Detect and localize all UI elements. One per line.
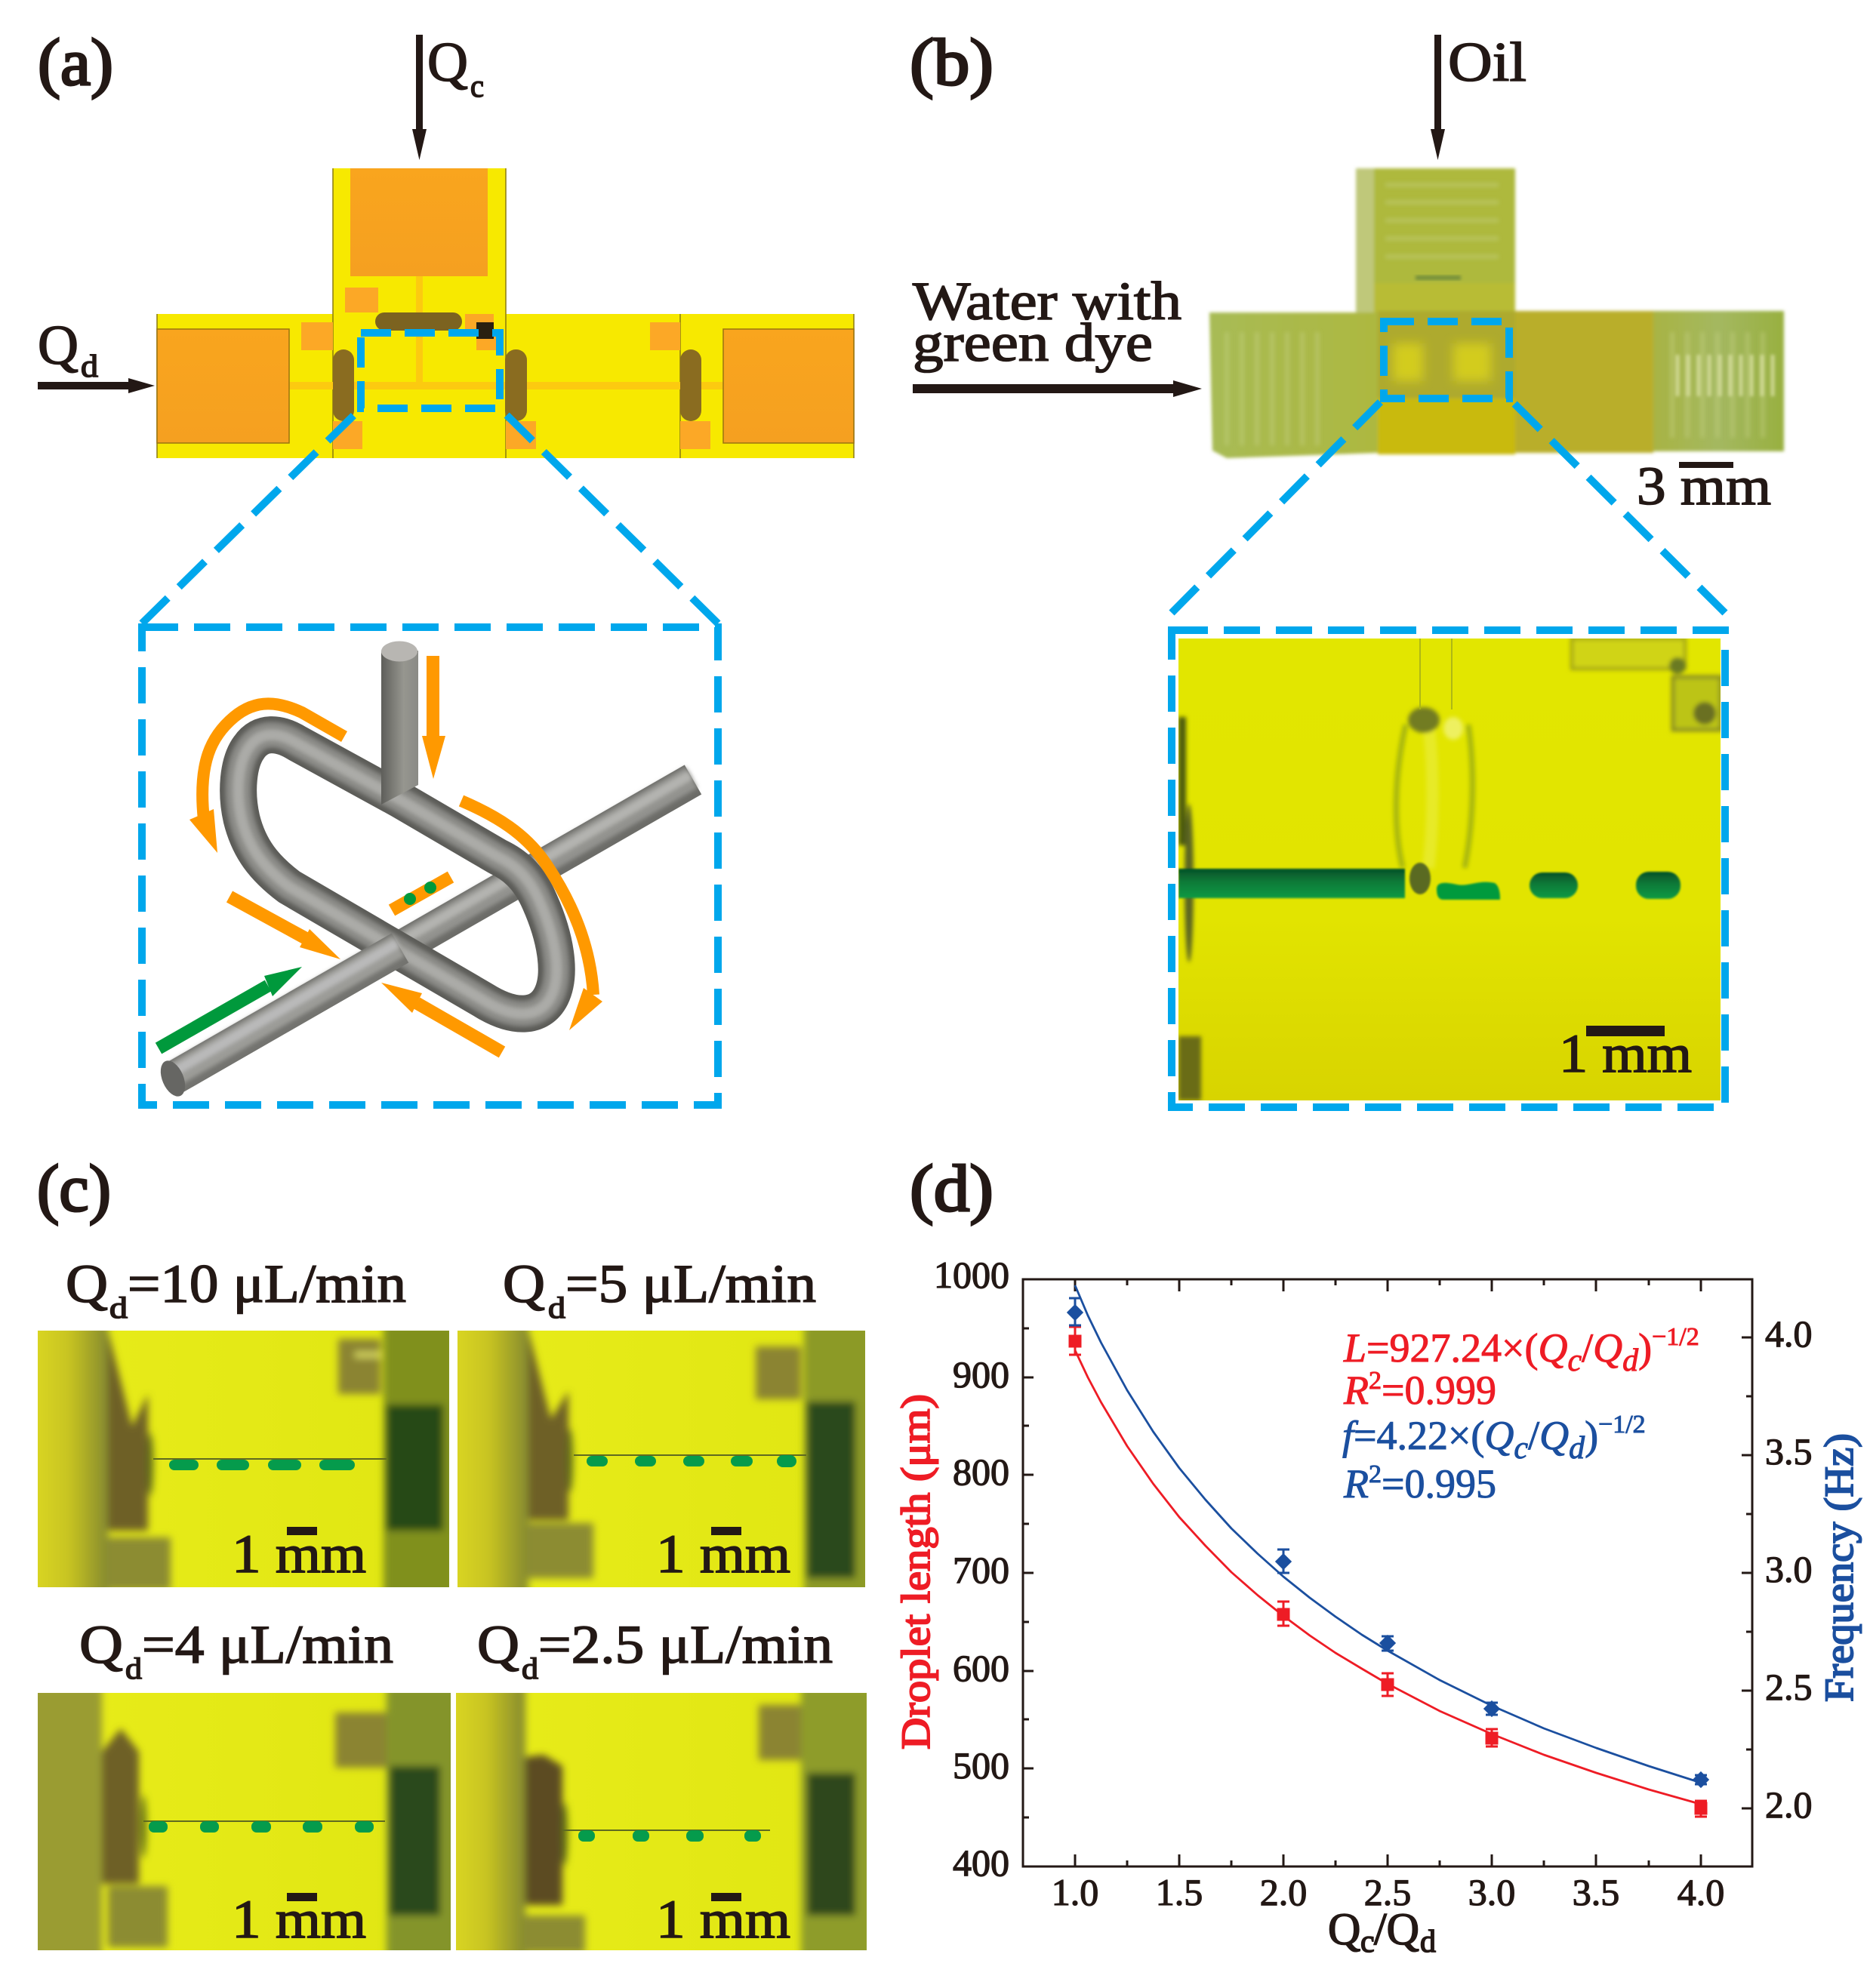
x-axis tick labels: 3.5 [1573,1871,1619,1913]
flow arrow: bottom straight [381,983,502,1052]
x-axis title: d [1420,1925,1436,1959]
label: water with green dye [913,271,1181,373]
heading: (c): (c) [37,1152,111,1226]
left y-axis tick labels: 900 [953,1353,1009,1396]
flow arrow: down [422,656,445,779]
right y-axis tick labels [1765,1313,1812,1826]
inset: droplet formation photo [1172,630,1725,1107]
heading: (b): (b) [910,26,994,100]
x-axis tick labels [1052,1871,1724,1913]
flow arrow: right curve [461,801,602,1030]
x-axis title: Q [1328,1904,1360,1954]
title: Qd=4: =4 μL/min [142,1614,393,1675]
cross channel tube (lower, in front) [170,943,400,1079]
right y-axis tick labels: 2.0 [1765,1783,1812,1826]
left y-axis tick labels: 500 [953,1744,1009,1786]
left y-axis title: Droplet length (μm) [893,1394,938,1750]
label: Oil: Oil [1448,32,1526,94]
flow arrow: green dispersed phase [159,967,302,1048]
label: water with green dye: Water with [913,271,1181,331]
right y-axis tick labels: 3.5 [1765,1430,1812,1473]
title: Qd=4 [79,1614,393,1685]
flow arrow: upper left curve [189,703,344,853]
left y-axis tick labels: 1000 [934,1254,1009,1296]
equation: length fit: L=927.24×(Q [1344,1325,1567,1371]
inlet stub [381,642,418,805]
arrow: oil inlet [1431,35,1445,160]
droplet 3 [1636,872,1681,899]
equation: frequency fit: f=4.22×(Q [1342,1413,1514,1458]
label: Qc [427,32,484,104]
droplets in oil marker [392,877,451,910]
channel line [1434,868,1721,871]
title: Qd=2.5: Q [477,1614,519,1675]
zoom guide lines [142,408,718,623]
channel node [1409,863,1431,894]
chart axes frame and ticks [1023,1279,1752,1866]
equation: length fit: Q [1593,1325,1622,1371]
data points: frequency [1068,1298,1708,1786]
equation: length fit: −1/2 [1652,1323,1699,1351]
equation: frequency fit [1342,1411,1646,1506]
data points: droplet length [1069,1327,1707,1817]
zoom guide lines [1172,399,1725,613]
x-axis tick labels: 2.0 [1260,1871,1307,1913]
photo: Qd=10 [30,1325,455,1596]
title: Qd=4: Q [79,1614,123,1675]
fit curve: droplet length [1075,1350,1701,1804]
x-axis tick labels: 4.0 [1677,1871,1724,1913]
title: Qd=5: Q [503,1254,545,1314]
equation: frequency fit: −1/2 [1598,1411,1646,1439]
title: Qd=10: Q [66,1254,108,1314]
arrow: water inlet [913,380,1202,397]
device model: yellow T-junction cross-section [157,168,854,458]
label: Qd: d [81,349,98,384]
scale bar: photo 1: 1 mm [232,1524,366,1584]
x-axis title: /Q [1374,1904,1419,1954]
scale bar: photo 4: 1 mm [656,1889,790,1950]
label: Qc: Q [427,32,468,94]
scale bar: 3 mm: 3 mm [1637,456,1771,516]
panel: (b) printed device photograph [910,26,1784,1107]
photo background details [1178,639,1721,1100]
scale bar: photo 2: 1 mm [656,1524,790,1584]
x-axis tick labels: 1.5 [1156,1871,1203,1913]
left y-axis tick labels: 600 [953,1647,1009,1689]
equation: length fit: R [1343,1368,1369,1413]
equation: frequency fit: =0.995 [1382,1461,1496,1506]
oil channel ring [1396,707,1472,868]
arrow: Qc inlet [412,35,427,160]
equation: frequency fit: 2 [1369,1460,1382,1488]
right y-axis tick labels: 4.0 [1765,1313,1812,1355]
equation: length fit: 2 [1369,1367,1382,1395]
equation: frequency fit: c [1514,1431,1528,1466]
photo: Qd=2.5 [448,1687,873,1959]
title: Qd=4: d [125,1651,142,1685]
x-axis title [1328,1904,1436,1959]
panel: (a) CAD device and channel schematic [38,26,854,1105]
label: Qc: c [470,69,484,104]
zoom region: dashed blue box [1384,322,1509,399]
panel: (c) droplets at different flow rates [30,1152,873,1959]
title: Qd=5 [503,1254,816,1325]
equation: frequency fit: R [1343,1461,1369,1506]
left y-axis tick labels: 800 [953,1451,1009,1493]
title: Qd=2.5: =2.5 μL/min [538,1614,833,1675]
inset: channel schematic in dashed box [142,627,718,1105]
zoom region: dashed blue box [361,333,500,408]
title: Qd=10: =10 μL/min [128,1254,406,1314]
photo: Qd=5 [450,1325,872,1596]
x-axis tick labels: 3.0 [1468,1871,1515,1913]
equation: length fit: ) [1638,1325,1652,1371]
left y-axis tick labels: 700 [953,1549,1009,1591]
scale bar: photo 3: 1 mm [232,1889,366,1950]
equation: frequency fit: / [1528,1413,1539,1458]
equation: frequency fit: ) [1585,1413,1598,1458]
title: Qd=10 [66,1254,406,1325]
photo: Qd=4 [30,1687,458,1959]
heading: (a): (a) [38,26,113,100]
title: Qd=5: =5 μL/min [565,1254,816,1314]
device photo [1209,168,1784,458]
equation: length fit: / [1582,1325,1593,1371]
fit curve: frequency [1075,1285,1701,1783]
title: Qd=10: d [109,1291,128,1325]
scale bar: 1 mm: 1 mm [1559,1023,1692,1084]
water stream [1178,869,1405,898]
loop channel tube [239,735,556,1014]
cross channel tube (upper) [170,775,693,1079]
droplet 1 [1437,882,1500,900]
right y-axis tick labels: 2.5 [1765,1666,1812,1708]
tube end cap [156,1057,190,1100]
dashed frame [1172,630,1725,1107]
flow arrow: left straight [230,897,340,959]
x-axis title: c [1360,1925,1375,1959]
title: Qd=5: d [548,1291,565,1325]
equation: length fit: c [1567,1343,1582,1378]
left y-axis tick labels: 400 [953,1842,1009,1884]
x-axis tick labels: 1.0 [1052,1871,1098,1913]
left y-axis tick labels [934,1254,1009,1884]
label: Qd: Q [38,315,79,377]
right y-axis tick labels: 3.0 [1765,1548,1812,1590]
droplet 2 [1530,872,1578,898]
label: water with green dye: green dye [913,312,1153,373]
heading: (d): (d) [910,1152,994,1226]
label: Qd [38,315,98,384]
title: Qd=2.5: d [522,1651,538,1685]
equation: frequency fit: Q [1539,1413,1569,1458]
panel: (d) droplet length and frequency chart [893,1152,1862,1959]
equation: length fit: =0.999 [1382,1368,1496,1413]
equation: length fit [1343,1323,1699,1413]
right y-axis title: Frequency (Hz) [1816,1433,1862,1702]
equation: length fit: d [1622,1343,1639,1378]
title: Qd=2.5 [477,1614,833,1685]
x-axis tick labels: 2.5 [1364,1871,1411,1913]
equation: frequency fit: d [1569,1431,1585,1466]
arrow: Qd inlet [38,378,155,393]
